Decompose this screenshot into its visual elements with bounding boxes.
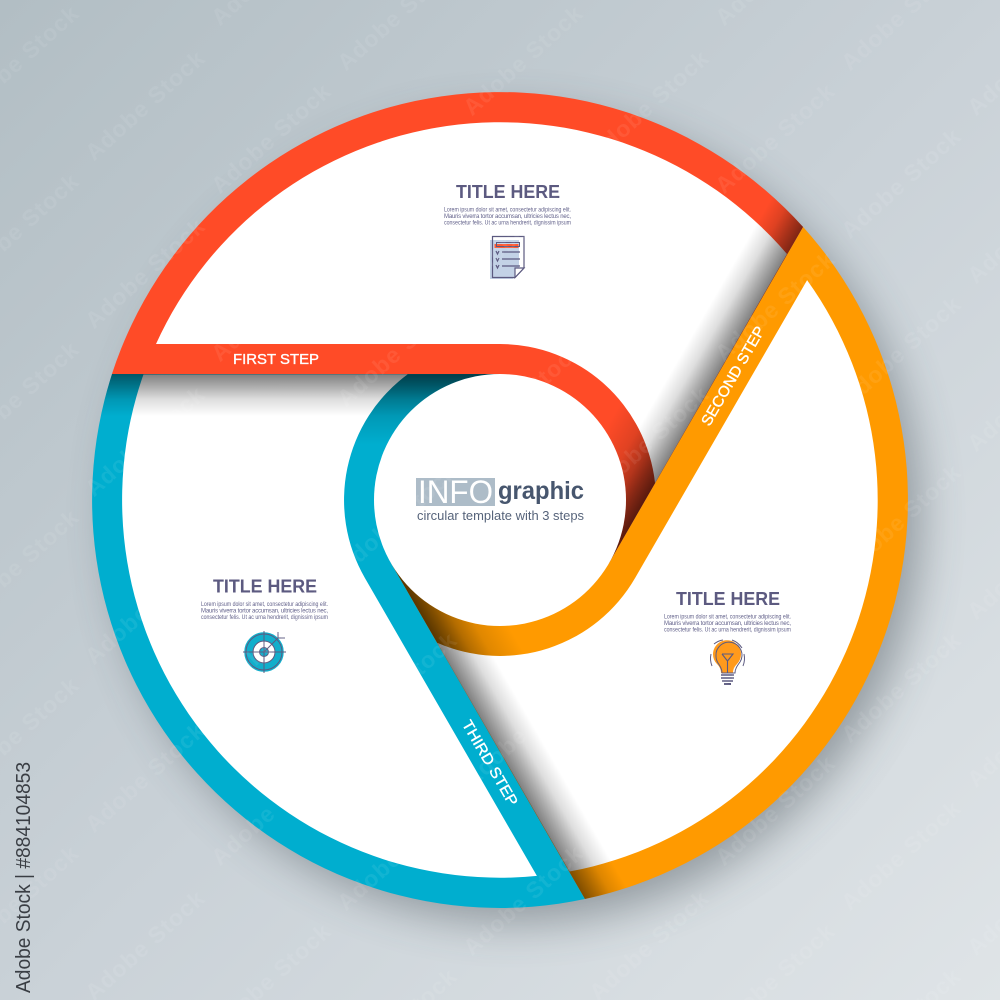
body text: consectetur felis. Ut ac urna hendrerit, dignissim ipsum bbox=[201, 615, 328, 621]
title: TITLE HERE bbox=[213, 576, 317, 596]
subtitle: circular template with 3 steps bbox=[417, 508, 584, 523]
INFO badge: INFO bbox=[418, 474, 493, 510]
centre circle bbox=[374, 374, 626, 626]
body text: consectetur felis. Ut ac urna hendrerit, dignissim ipsum bbox=[444, 220, 571, 226]
circle drop shadow bbox=[112, 114, 920, 922]
body text bbox=[664, 614, 791, 634]
label: third step: THIRD STEP bbox=[458, 717, 521, 809]
icon: light bulb bbox=[711, 640, 744, 684]
body text: Mauris viverra tortor accumsan, ultricies lectus nec, bbox=[444, 214, 571, 220]
text block: top bbox=[444, 182, 571, 226]
icon: target bbox=[243, 631, 286, 673]
body text: Mauris viverra tortor accumsan, ultricies lectus nec, bbox=[664, 621, 791, 627]
body text: Mauris viverra tortor accumsan, ultricies lectus nec, bbox=[201, 608, 328, 614]
body text bbox=[201, 602, 328, 621]
body text: Lorem ipsum dolor sit amet, consectetur adipiscing elit. bbox=[664, 614, 791, 620]
title: TITLE HERE bbox=[456, 182, 560, 202]
centre title bbox=[416, 474, 584, 523]
title: TITLE HERE bbox=[676, 589, 780, 609]
panel: first step (red) bbox=[112, 92, 803, 563]
stock credit: Adobe Stock | #884104853 bbox=[13, 762, 35, 993]
body text: consectetur felis. Ut ac urna hendrerit, dignissim ipsum bbox=[664, 628, 791, 634]
text block: right bbox=[664, 589, 791, 634]
panel: second step (orange) bbox=[294, 132, 1000, 966]
label: first step: FIRST STEP bbox=[233, 351, 319, 368]
body text: Lorem ipsum dolor sit amet, consectetur adipiscing elit. bbox=[444, 208, 571, 214]
body text bbox=[444, 208, 571, 226]
graphic word: graphic bbox=[498, 477, 584, 505]
icon: checklist document bbox=[490, 236, 524, 279]
label: second step: SECOND STEP bbox=[698, 324, 769, 429]
panel: third step (blue) bbox=[0, 206, 749, 1000]
text block: left bbox=[201, 576, 328, 621]
body text: Lorem ipsum dolor sit amet, consectetur adipiscing elit. bbox=[201, 602, 328, 608]
